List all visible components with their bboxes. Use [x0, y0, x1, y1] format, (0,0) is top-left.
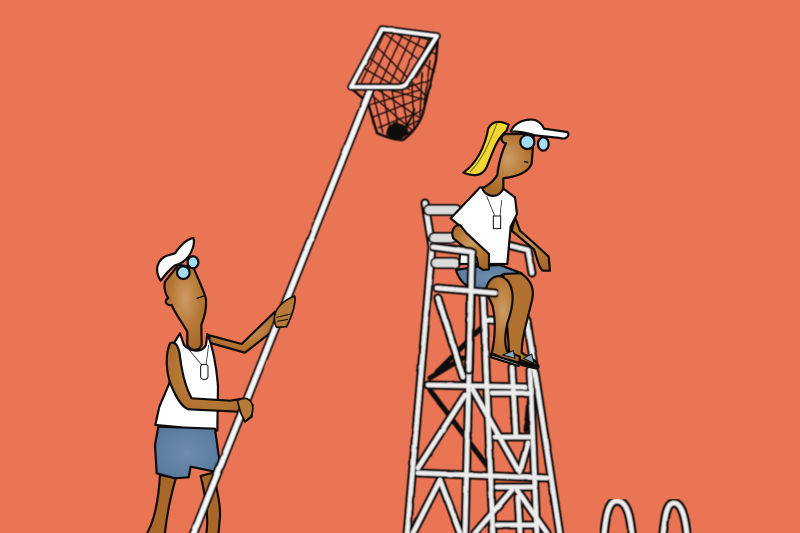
far leg [201, 473, 220, 533]
pool ladder handrails [604, 501, 687, 533]
hands gripping pole [237, 296, 295, 422]
chair front armrest and post [433, 247, 495, 370]
trapped black ball [386, 122, 408, 139]
shorts [456, 265, 522, 290]
whistle necklace [487, 196, 502, 229]
mouth [197, 296, 204, 298]
net bag [352, 36, 438, 140]
front leg [486, 276, 520, 363]
back leg and hand [512, 217, 550, 271]
whistle necklace [185, 345, 209, 379]
standing lifeguard [146, 238, 278, 533]
shorts [155, 427, 219, 478]
pool skimmer net [193, 29, 438, 533]
shirt [451, 187, 517, 264]
lifeguard tower [407, 203, 560, 533]
net frame [351, 29, 437, 87]
far arm [209, 312, 278, 353]
ponytail [463, 122, 509, 175]
chair back slats [429, 210, 456, 263]
net mesh [360, 30, 438, 140]
white cap [157, 238, 194, 281]
sunglasses [177, 256, 198, 279]
near leg [146, 475, 176, 533]
seated lifeguard [451, 120, 568, 369]
tower struts [407, 203, 560, 533]
neck and head [164, 265, 206, 350]
neck and head [482, 134, 534, 196]
near arm [167, 343, 253, 422]
sandals [491, 351, 539, 369]
tower black cross braces [430, 322, 530, 467]
near arm [452, 225, 489, 270]
white cap [511, 120, 568, 138]
tank top [155, 333, 218, 431]
sunglasses [520, 135, 549, 151]
pole [193, 88, 371, 533]
